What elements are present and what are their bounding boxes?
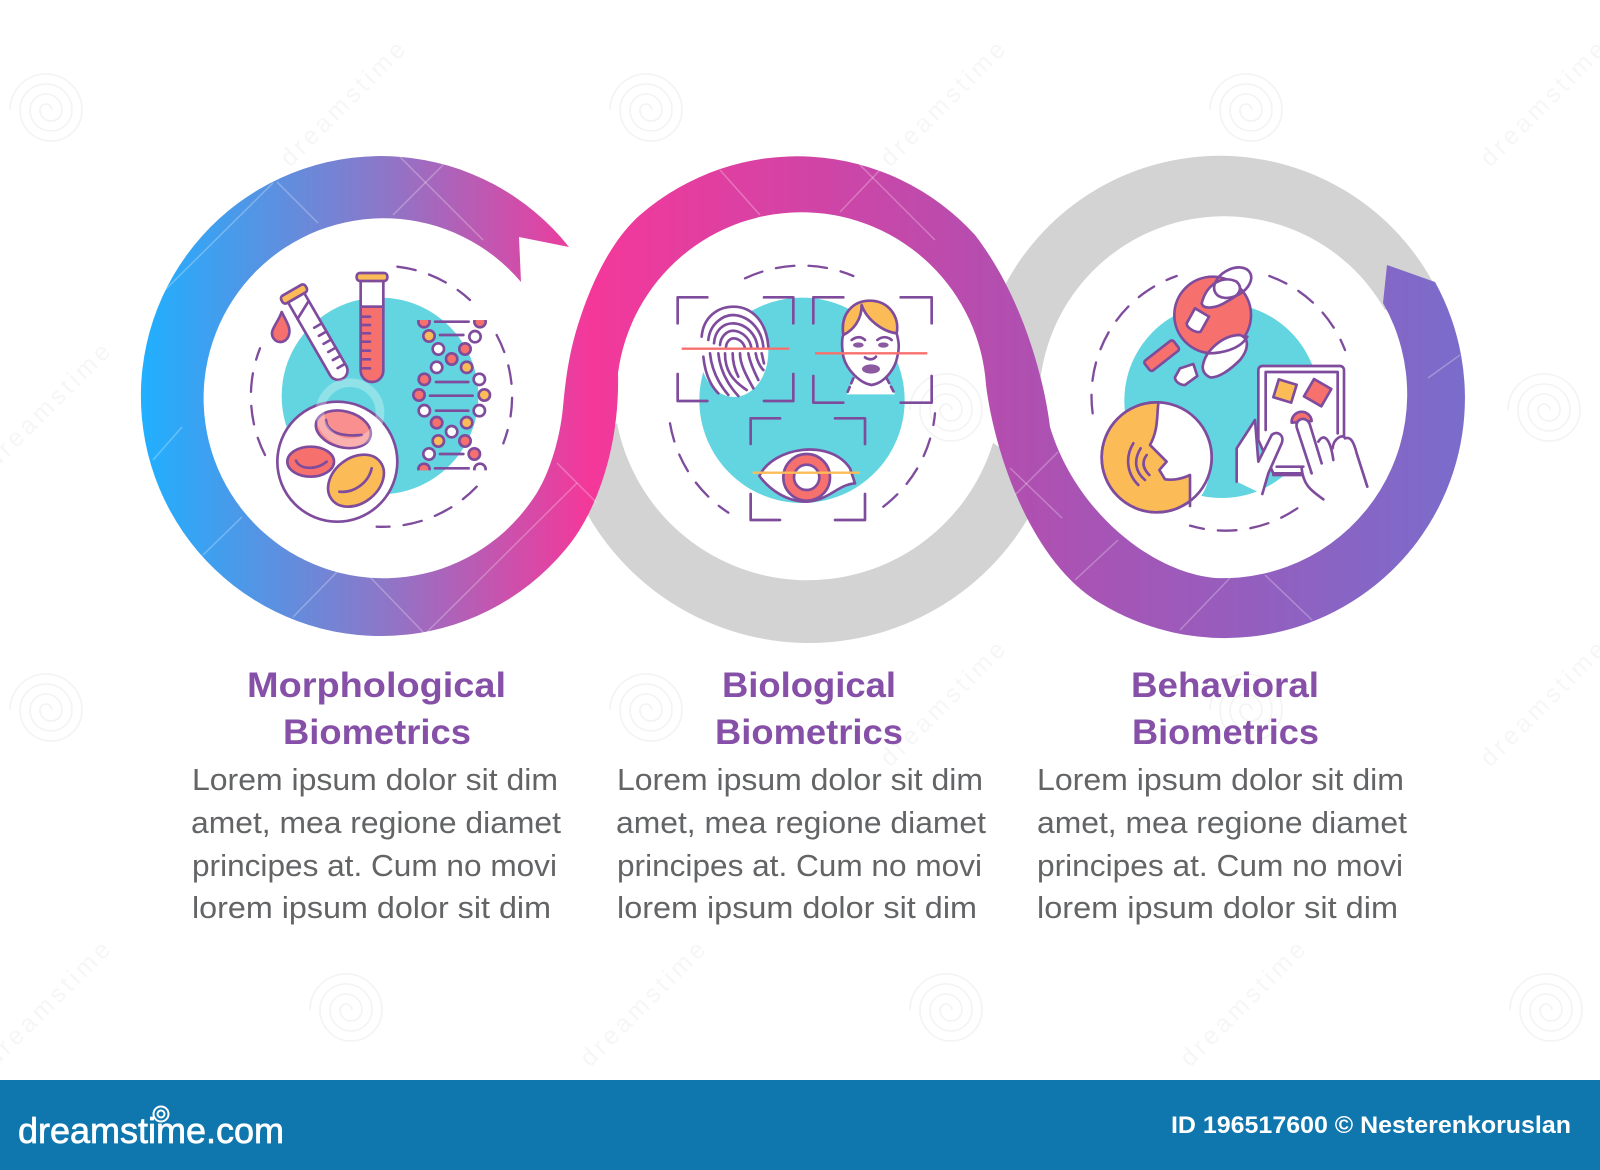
body copy 1: principes at. Cum no movi: [192, 848, 557, 883]
body copy 2: amet, mea regione diamet: [616, 805, 986, 840]
heading: Biological Biometrics: [715, 666, 903, 752]
flowing gradient ribbon with arrow head: [141, 156, 1465, 638]
speaking head: [1102, 402, 1212, 512]
heading: Morphological Biometrics: Morphological: [247, 666, 506, 705]
icon: biological – fingerprint, face and iris scans: [670, 266, 935, 520]
body copy 1: amet, mea regione diamet: [191, 805, 561, 840]
column 2 text: [616, 666, 986, 925]
heading: Morphological Biometrics: [247, 666, 506, 752]
body copy 2: Lorem ipsum dolor sit dim: [617, 762, 983, 797]
column 1 text: [191, 666, 561, 925]
watermark spirals and marks: dreamstime: [874, 636, 1011, 772]
heading: Behavioral Biometrics: [1131, 666, 1319, 752]
watermark spirals and marks: dreamstime: [874, 36, 1011, 172]
teal backdrop 2: [699, 298, 905, 503]
body copy 3: lorem ipsum dolor sit dim: [1037, 890, 1398, 925]
tablet and hands: [1237, 366, 1367, 499]
heading: Biological Biometrics: Biometrics: [715, 713, 903, 752]
icon: morphological – test tubes, blood cells, DNA: [251, 267, 512, 527]
body copy 3: Lorem ipsum dolor sit dim: [1037, 762, 1404, 797]
body copy 2: lorem ipsum dolor sit dim: [617, 890, 977, 925]
dashed orbit 3: [1092, 276, 1345, 531]
heading: Behavioral Biometrics: Behavioral: [1131, 666, 1319, 705]
heading: Morphological Biometrics: Biometrics: [283, 713, 471, 752]
image id credit: ID 196517600 © Nesterenkoruslan: [1171, 1112, 1571, 1139]
footer logo spiral: [154, 1106, 168, 1122]
watermark spirals and marks: dreamstime: [274, 36, 411, 172]
teal backdrop 1: [282, 298, 478, 494]
body copy 1: [191, 762, 561, 925]
grey ring: third circle upper arc: [1005, 156, 1437, 383]
magnifier and footprints: [1143, 261, 1257, 385]
DNA helix: [413, 316, 490, 475]
dashed orbit 1: [251, 267, 512, 527]
upright test tube: [357, 273, 387, 382]
body copy 1: lorem ipsum dolor sit dim: [192, 890, 551, 925]
watermark spirals and marks: dreamstime: [574, 936, 711, 1072]
body copy 3: principes at. Cum no movi: [1037, 848, 1403, 883]
body copy 3: [1037, 762, 1407, 925]
body copy 1: Lorem ipsum dolor sit dim: [192, 762, 558, 797]
body copy 2: principes at. Cum no movi: [617, 848, 982, 883]
watermark ring: [320, 383, 380, 443]
iris scan: [751, 418, 865, 520]
footer bar: [0, 1080, 1600, 1170]
body copy 2: [616, 762, 986, 925]
face scan: [813, 297, 932, 403]
fingerprint scan: [678, 297, 793, 401]
blood cells lens: [277, 402, 397, 522]
watermark spirals and marks: dreamstime: [1174, 936, 1311, 1072]
column 3 text: [1037, 666, 1407, 925]
blood drop: [272, 312, 289, 342]
heading: Biological Biometrics: Biological: [722, 666, 896, 705]
teal backdrop 3: [1124, 303, 1319, 498]
footer logo text: dreamstime.com: [18, 1110, 284, 1151]
heading: Behavioral Biometrics: Biometrics: [1132, 713, 1319, 752]
body copy 3: amet, mea regione diamet: [1037, 805, 1407, 840]
icon: behavioral – footprints, voice, touch gestures: [1092, 261, 1367, 531]
tilted test tube: [280, 283, 355, 386]
grey ring: second circle lower arc: [585, 423, 1035, 643]
dashed orbit 2: [670, 266, 935, 513]
